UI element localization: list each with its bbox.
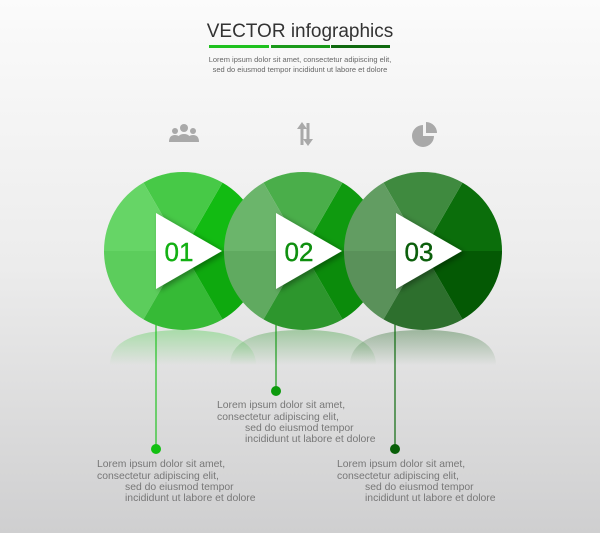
text block 2: sed do eiusmod tempor [245, 423, 354, 434]
triangle 01: 01 [165, 237, 193, 267]
circle 03 [344, 172, 502, 330]
connector line 1 [151, 320, 161, 454]
subtitle [209, 55, 391, 74]
text block 3 [337, 459, 496, 504]
reflections [110, 330, 496, 365]
text block 1: incididunt ut labore et dolore [125, 493, 256, 504]
text block 3: sed do eiusmod tempor [365, 482, 474, 493]
circle 02 [224, 172, 382, 330]
text block 3: Lorem ipsum dolor sit amet, [337, 459, 465, 470]
circle 01 [104, 172, 262, 330]
text block 3: consectetur adipiscing elit, [337, 471, 459, 482]
text block 1: consectetur adipiscing elit, [97, 471, 219, 482]
triangle 01 [156, 213, 222, 289]
triangle 03 [396, 213, 462, 289]
triangle 02: 02 [285, 237, 313, 267]
text block 3: incididunt ut labore et dolore [365, 493, 496, 504]
subtitle: Lorem ipsum dolor sit amet, consectetur adipiscing elit, [209, 55, 391, 64]
icon: people [169, 124, 199, 142]
title underline bars [209, 45, 390, 48]
text block 1: Lorem ipsum dolor sit amet, [97, 459, 225, 470]
icon: pie chart [412, 122, 437, 147]
text block 1: sed do eiusmod tempor [125, 482, 234, 493]
title: VECTOR infographics [207, 21, 393, 42]
triangle 02 [276, 213, 342, 289]
subtitle: sed do eiusmod tempor incididunt ut labore et dolore [213, 65, 387, 74]
connector line 3 [390, 320, 400, 454]
connector line 2 [271, 320, 281, 396]
triangle 03: 03 [405, 237, 433, 267]
text block 2 [217, 400, 376, 445]
icon: up down arrows [297, 122, 313, 146]
text block 2: Lorem ipsum dolor sit amet, [217, 400, 345, 411]
text block 1 [97, 459, 256, 504]
text block 2: incididunt ut labore et dolore [245, 434, 376, 445]
text block 2: consectetur adipiscing elit, [217, 412, 339, 423]
